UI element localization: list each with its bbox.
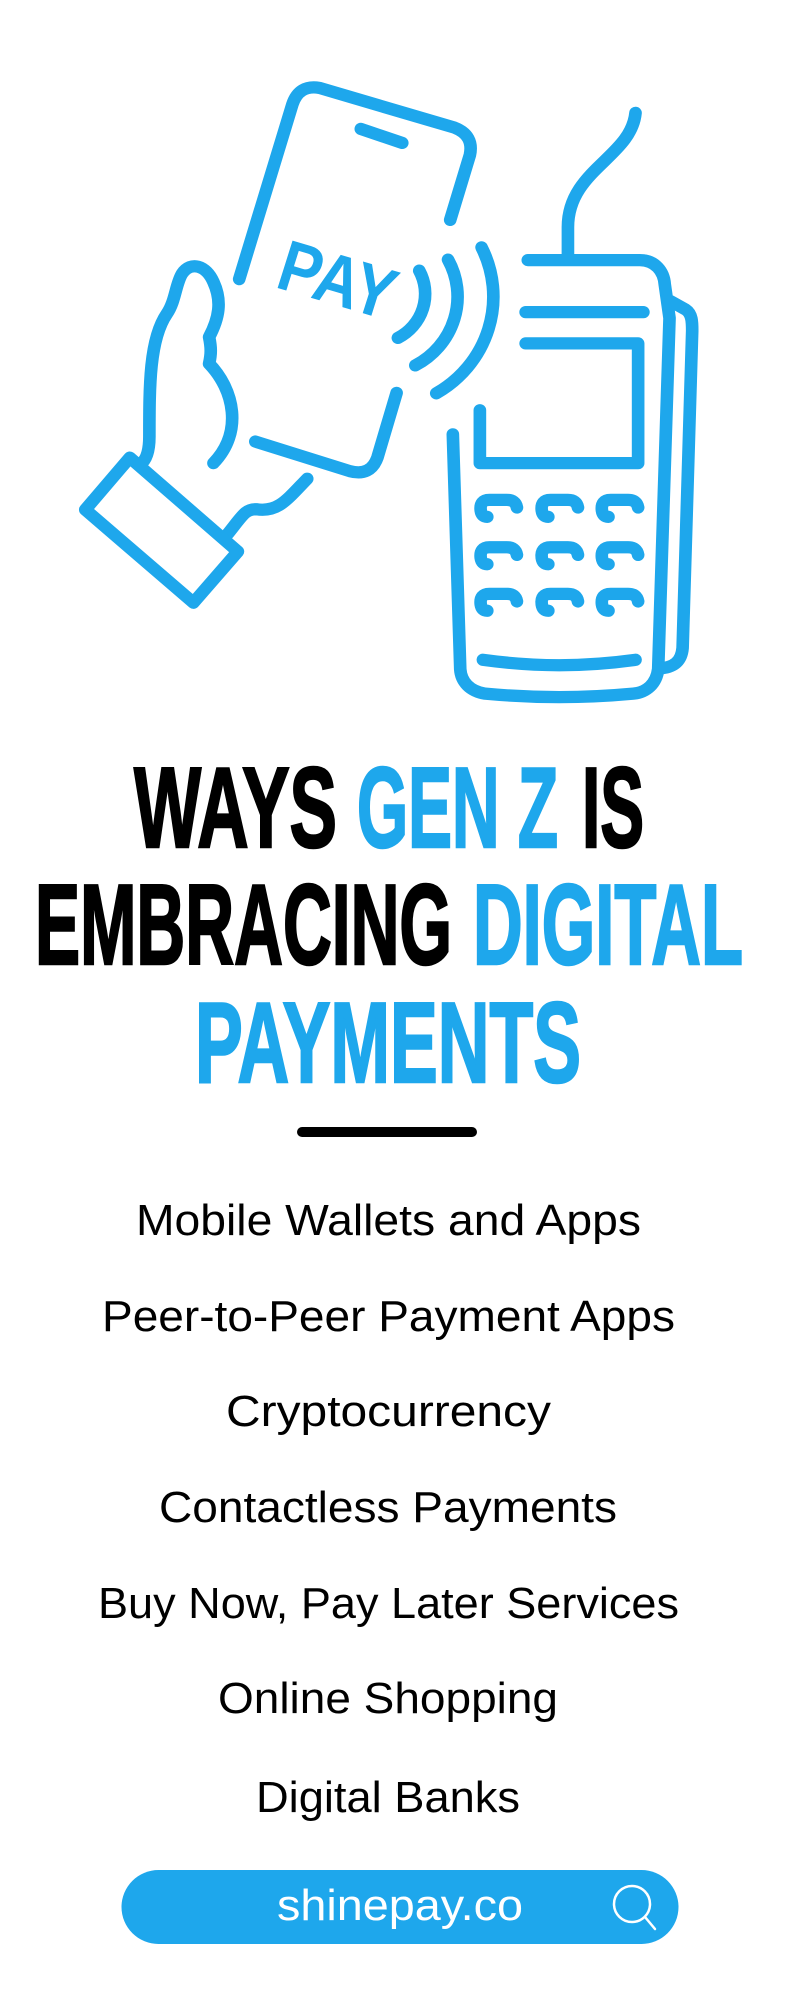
website url: shinepay.co bbox=[277, 1881, 523, 1930]
list of payment ways bbox=[98, 1196, 679, 1822]
icon: hand with cuff bbox=[85, 266, 307, 603]
title: EMBRACING bbox=[35, 862, 452, 989]
title: PAYMENTS bbox=[195, 980, 581, 1107]
search pill bbox=[122, 1870, 678, 1944]
icon: magnifier bbox=[614, 1886, 655, 1929]
divider bar bbox=[297, 1127, 477, 1137]
icon: payment terminal bbox=[453, 113, 692, 697]
icon: phone bbox=[239, 87, 471, 472]
list of payment ways: Peer-to-Peer Payment Apps bbox=[102, 1292, 675, 1341]
title: IS bbox=[582, 745, 644, 872]
title bbox=[35, 745, 743, 1107]
icon: contactless waves bbox=[398, 247, 493, 393]
icon: phone: PAY bbox=[269, 226, 406, 335]
list of payment ways: Online Shopping bbox=[218, 1674, 558, 1723]
list of payment ways: Cryptocurrency bbox=[226, 1387, 551, 1436]
list of payment ways: Buy Now, Pay Later Services bbox=[98, 1579, 679, 1628]
title: GEN Z bbox=[357, 745, 558, 872]
list of payment ways: Digital Banks bbox=[256, 1773, 520, 1822]
list of payment ways: Contactless Payments bbox=[159, 1483, 617, 1532]
illustration: hand tapping phone on payment terminal bbox=[85, 87, 692, 697]
title: WAYS bbox=[134, 745, 337, 872]
list of payment ways: Mobile Wallets and Apps bbox=[136, 1196, 641, 1245]
